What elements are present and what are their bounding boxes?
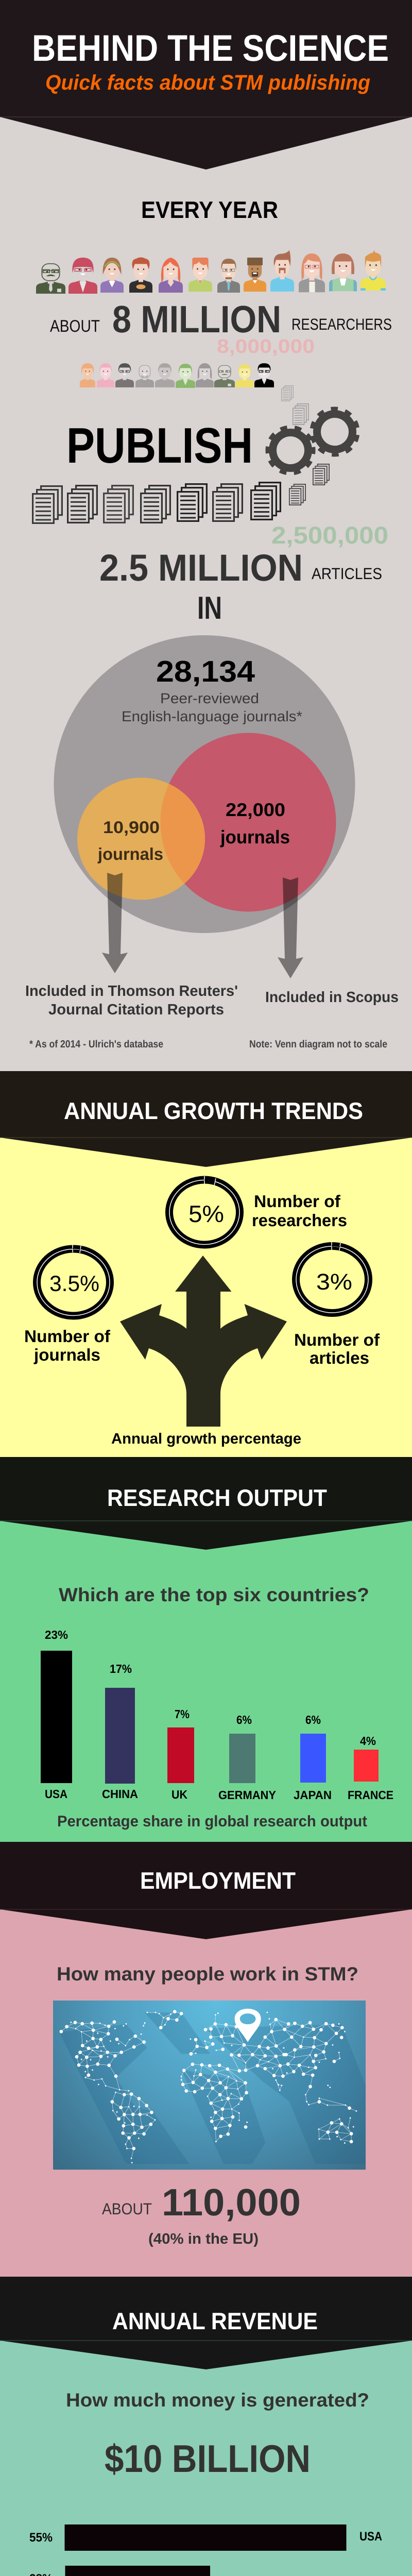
chart: venn diagram of journals: 28,134: [156, 655, 255, 688]
label: Thomson Reuters: [25, 983, 238, 1018]
stat: about 110,000: [102, 2181, 301, 2224]
world network map: [53, 2001, 368, 2170]
label: researchers: [252, 1192, 347, 1230]
faded number 8,000,000: 8,000,000: [217, 336, 315, 358]
bar chart: top six countries: 23%: [45, 1628, 68, 1641]
arrow: three-way branching arrow: [120, 1256, 287, 1427]
label: journals: Number of: [24, 1327, 111, 1346]
question: Which are the top six countries?: [59, 1584, 369, 1605]
ring: 5% researchers: [169, 1176, 240, 1245]
label: Scopus: Included in Scopus: [265, 989, 399, 1006]
label: articles: articles: [310, 1348, 369, 1367]
bar chart: top six countries: JAPAN: [294, 1788, 332, 1802]
chart: venn diagram of journals: journals: [220, 826, 290, 848]
label: journals: [24, 1327, 111, 1364]
stat: about 8 million researchers: [50, 298, 392, 341]
stat: about 110,000: 110,000: [162, 2181, 301, 2224]
icon: gears: [264, 405, 361, 477]
header band: title chevron: [0, 0, 412, 170]
arrow: to Scopus: [278, 877, 303, 978]
header band: [0, 1457, 412, 1550]
footnote: Ulrich's: * As of 2014 - Ulrich's database: [29, 1039, 163, 1050]
bar chart: top six countries: 17%: [110, 1662, 132, 1675]
label: Thomson Reuters: Included in Thomson Reuters': [25, 983, 238, 999]
bar chart: top six countries: UK: [171, 1788, 187, 1801]
ring: 5% researchers: 5%: [188, 1200, 224, 1227]
bar chart: revenue share: [29, 2524, 382, 2576]
chart: venn diagram of journals: journals: [97, 844, 163, 863]
label: articles: Number of: [294, 1330, 380, 1349]
bar chart: revenue share: USA: [359, 2530, 382, 2544]
label: researchers: researchers: [252, 1211, 347, 1230]
header band: [0, 1071, 412, 1167]
bar chart: top six countries: 6%: [236, 1713, 252, 1726]
panel: annual growth trends: [0, 1071, 412, 1457]
stat: 2.5 million articles: ARTICLES: [312, 565, 382, 583]
stat: about 110,000: ABOUT: [102, 2200, 152, 2218]
arrow: to Thomson Reuters: [102, 873, 128, 973]
heading: ANNUAL REVENUE: [112, 2308, 318, 2334]
text: in: IN: [197, 590, 222, 626]
ring: 3.5% journals: [37, 1245, 110, 1316]
ring: 3% articles: [296, 1242, 369, 1313]
stat: about 8 million researchers: RESEARCHERS: [291, 315, 392, 333]
heading: RESEARCH OUTPUT: [107, 1484, 327, 1511]
panel: every year: [0, 0, 412, 1071]
chart: venn diagram of journals: Peer-reviewed: [160, 690, 259, 706]
header band: [0, 2277, 412, 2369]
label: researchers: Number of: [254, 1192, 341, 1211]
footnote: venn note: Note: Venn diagram not to scale: [249, 1039, 387, 1050]
subtitle: Quick facts about STM publishing: [45, 71, 370, 94]
question: How many people work in STM?: [57, 1963, 358, 1985]
heading: publish: PUBLISH: [66, 417, 253, 473]
stat: ten billion: $10 BILLION: [105, 2437, 311, 2480]
text: 40% in the EU: (40% in the EU): [148, 2231, 259, 2247]
bar chart: top six countries: 6%: [305, 1713, 321, 1726]
chart: venn diagram of journals: 22,000: [226, 799, 285, 820]
label: Thomson Reuters: Journal Citation Reports: [48, 1002, 224, 1018]
panel: research output: [0, 1457, 412, 1842]
stat: about 8 million researchers: ABOUT: [50, 316, 100, 335]
ring: 3% articles: 3%: [316, 1269, 352, 1295]
bar chart: top six countries: USA: [45, 1787, 67, 1801]
bar chart: revenue share: 55%: [29, 2531, 53, 2545]
icon: row of ten small researchers: [80, 363, 274, 388]
faded number 2,500,000: 2,500,000: [271, 521, 388, 549]
header band: [0, 1842, 412, 1939]
caption: Annual growth percentage: [111, 1431, 301, 1447]
heading: EMPLOYMENT: [140, 1867, 296, 1894]
panel: annual revenue: [0, 2277, 412, 2576]
heading: every year: EVERY YEAR: [141, 196, 278, 223]
heading: ANNUAL GROWTH TRENDS: [64, 1097, 363, 1124]
icon: document stacks rising from gears: [33, 386, 329, 523]
bar chart: top six countries: 7%: [175, 1707, 190, 1721]
stat: about 8 million researchers: 8 MILLION: [112, 298, 281, 341]
bar chart: top six countries: FRANCE: [348, 1788, 393, 1802]
label: articles: [294, 1330, 380, 1367]
bar chart: top six countries: 4%: [360, 1734, 376, 1748]
panel: employment: [0, 1842, 412, 2277]
chart: venn diagram of journals: [54, 635, 355, 933]
chart: venn diagram of journals: 10,900: [103, 818, 160, 837]
question: How much money is generated?: [66, 2389, 369, 2411]
ring: 3.5% journals: 3.5%: [49, 1272, 99, 1296]
chart: venn diagram of journals: English-language journals*: [122, 708, 302, 724]
icon: row of twelve researchers: [36, 250, 386, 294]
bar chart: top six countries: GERMANY: [218, 1788, 276, 1802]
caption: Percentage share in global research output: [57, 1813, 367, 1830]
bar chart: top six countries: [41, 1628, 393, 1802]
stat: 2.5 million articles: 2.5 MILLION: [99, 547, 303, 589]
bar chart: top six countries: CHINA: [102, 1787, 138, 1801]
label: journals: journals: [33, 1345, 100, 1364]
